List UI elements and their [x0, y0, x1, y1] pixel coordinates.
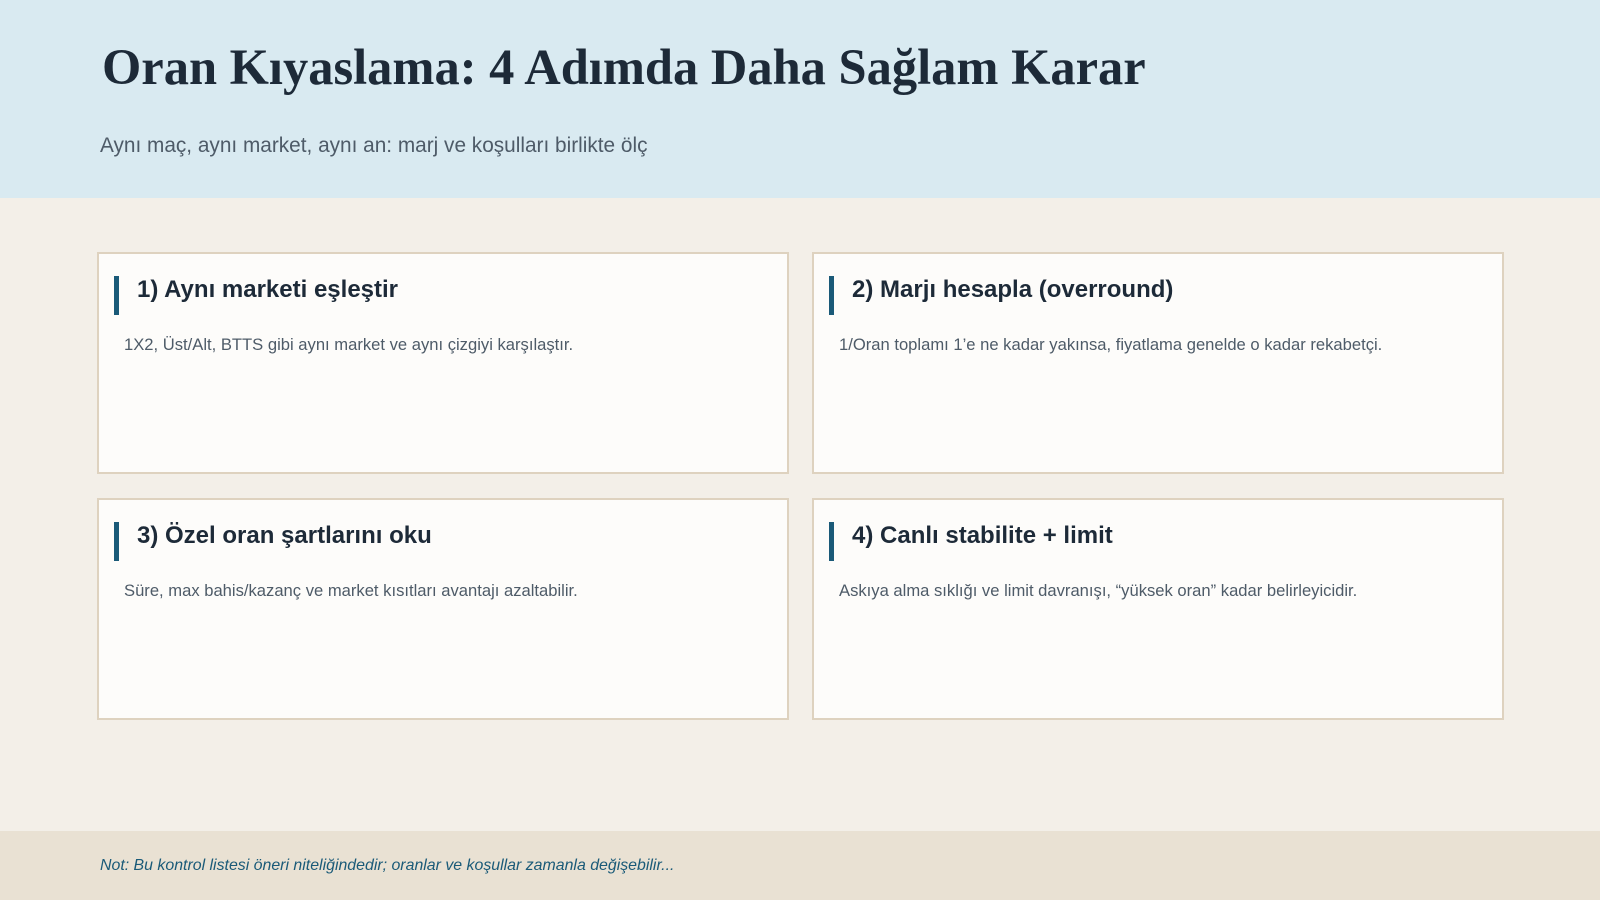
text: 1X2, Üst/Alt, BTTS gibi aynı market ve aynı çizgiyi karşılaştır.	[124, 335, 573, 354]
accent bar	[829, 276, 834, 315]
footer	[0, 831, 1600, 900]
accent bar	[114, 276, 119, 315]
text: Süre, max bahis/kazanç ve market kısıtları avantajı azaltabilir.	[124, 581, 578, 600]
text: Askıya alma sıklığı ve limit davranışı, “yüksek oran” kadar belirleyicidir.	[839, 581, 1357, 600]
text: 1/Oran toplamı 1’e ne kadar yakınsa, fiyatlama genelde o kadar rekabetçi.	[839, 335, 1382, 354]
panel: step 3	[97, 498, 789, 720]
panel: step 2	[812, 252, 1504, 474]
footer note: Not: Bu kontrol listesi öneri niteliğindedir; oranlar ve koşullar zamanla değişebilir...	[100, 857, 674, 874]
title: Oran Kıyaslama: 4 Adımda Daha Sağlam Karar	[102, 39, 1146, 95]
subtitle: Aynı maç, aynı market, aynı an: marj ve koşulları birlikte ölç	[100, 134, 647, 157]
panel: step 1	[97, 252, 789, 474]
heading: 4) Canlı stabilite + limit	[852, 522, 1113, 549]
panel: step 4	[812, 498, 1504, 720]
accent bar	[829, 522, 834, 561]
accent bar	[114, 522, 119, 561]
heading: 2) Marjı hesapla (overround)	[852, 276, 1173, 303]
heading: 3) Özel oran şartlarını oku	[137, 522, 432, 549]
header band	[0, 0, 1600, 198]
heading: 1) Aynı marketi eşleştir	[137, 276, 398, 303]
